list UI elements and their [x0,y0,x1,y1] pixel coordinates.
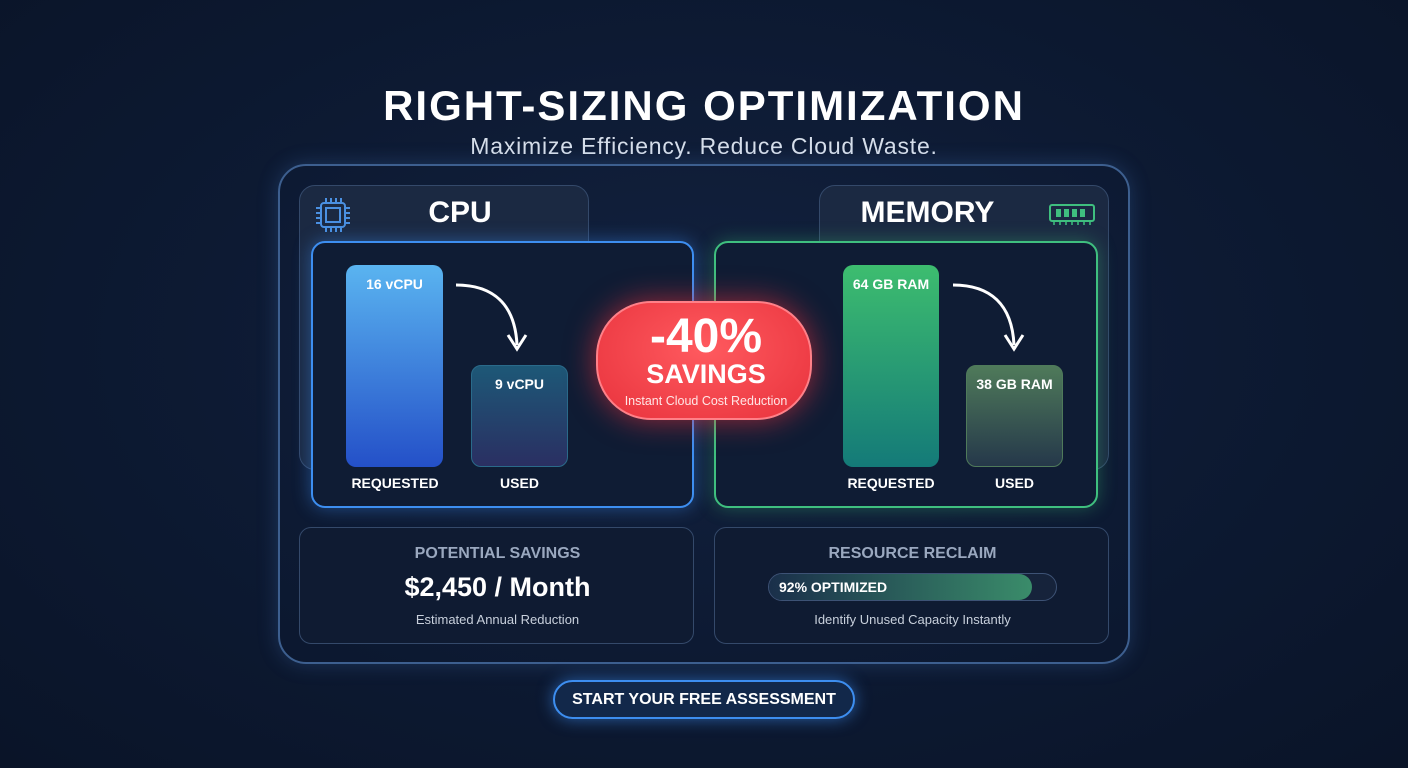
bar: mem requested [843,265,939,467]
card: resource reclaim: RESOURCE RECLAIM [828,545,996,562]
cpu header tab [299,185,589,470]
card: resource reclaim: Identify Unused Capacity Instantly [814,612,1011,627]
badge: savings: Instant Cloud Cost Reduction [625,394,787,408]
label: requested: REQUESTED [847,475,935,491]
subtitle: Maximize Efficiency. Reduce Cloud Waste. [470,133,938,159]
cpu heading: CPU [428,196,492,229]
badge: savings: SAVINGS [646,359,766,389]
bar: cpu used [471,365,568,467]
memory heading: MEMORY [861,196,994,229]
bar: mem requested: 64 GB RAM [853,276,929,292]
label: used: USED [500,475,539,491]
progress bar: 92% OPTIMIZED [779,579,887,595]
card: resource reclaim [714,527,1109,644]
card: potential savings: Estimated Annual Reduction [416,612,579,627]
label: used: USED [995,475,1034,491]
card: potential savings: $2,450 / Month [404,572,591,602]
card: potential savings [299,527,694,644]
title: RIGHT-SIZING OPTIMIZATION [383,82,1025,129]
badge: savings: -40% [650,310,762,363]
memory header tab [819,185,1109,470]
bar: mem used: 38 GB RAM [976,376,1053,392]
bar: cpu requested: 16 vCPU [366,276,423,292]
bar: cpu requested [346,265,443,467]
icon: cpu chip [316,198,350,232]
panel: cpu [311,241,694,508]
label: requested: REQUESTED [351,475,439,491]
button: cta [553,680,855,719]
card: potential savings: POTENTIAL SAVINGS [415,545,580,562]
bar: mem used [966,365,1063,467]
icon: ram [1049,204,1095,225]
panel: memory [714,241,1098,508]
bar: cpu used: 9 vCPU [495,376,544,392]
badge: savings [596,301,812,420]
arrow: memory [953,284,1024,352]
progress bar [768,573,1057,601]
outer frame [278,164,1130,664]
arrow: cpu [456,284,528,352]
button: cta: START YOUR FREE ASSESSMENT [572,691,836,708]
